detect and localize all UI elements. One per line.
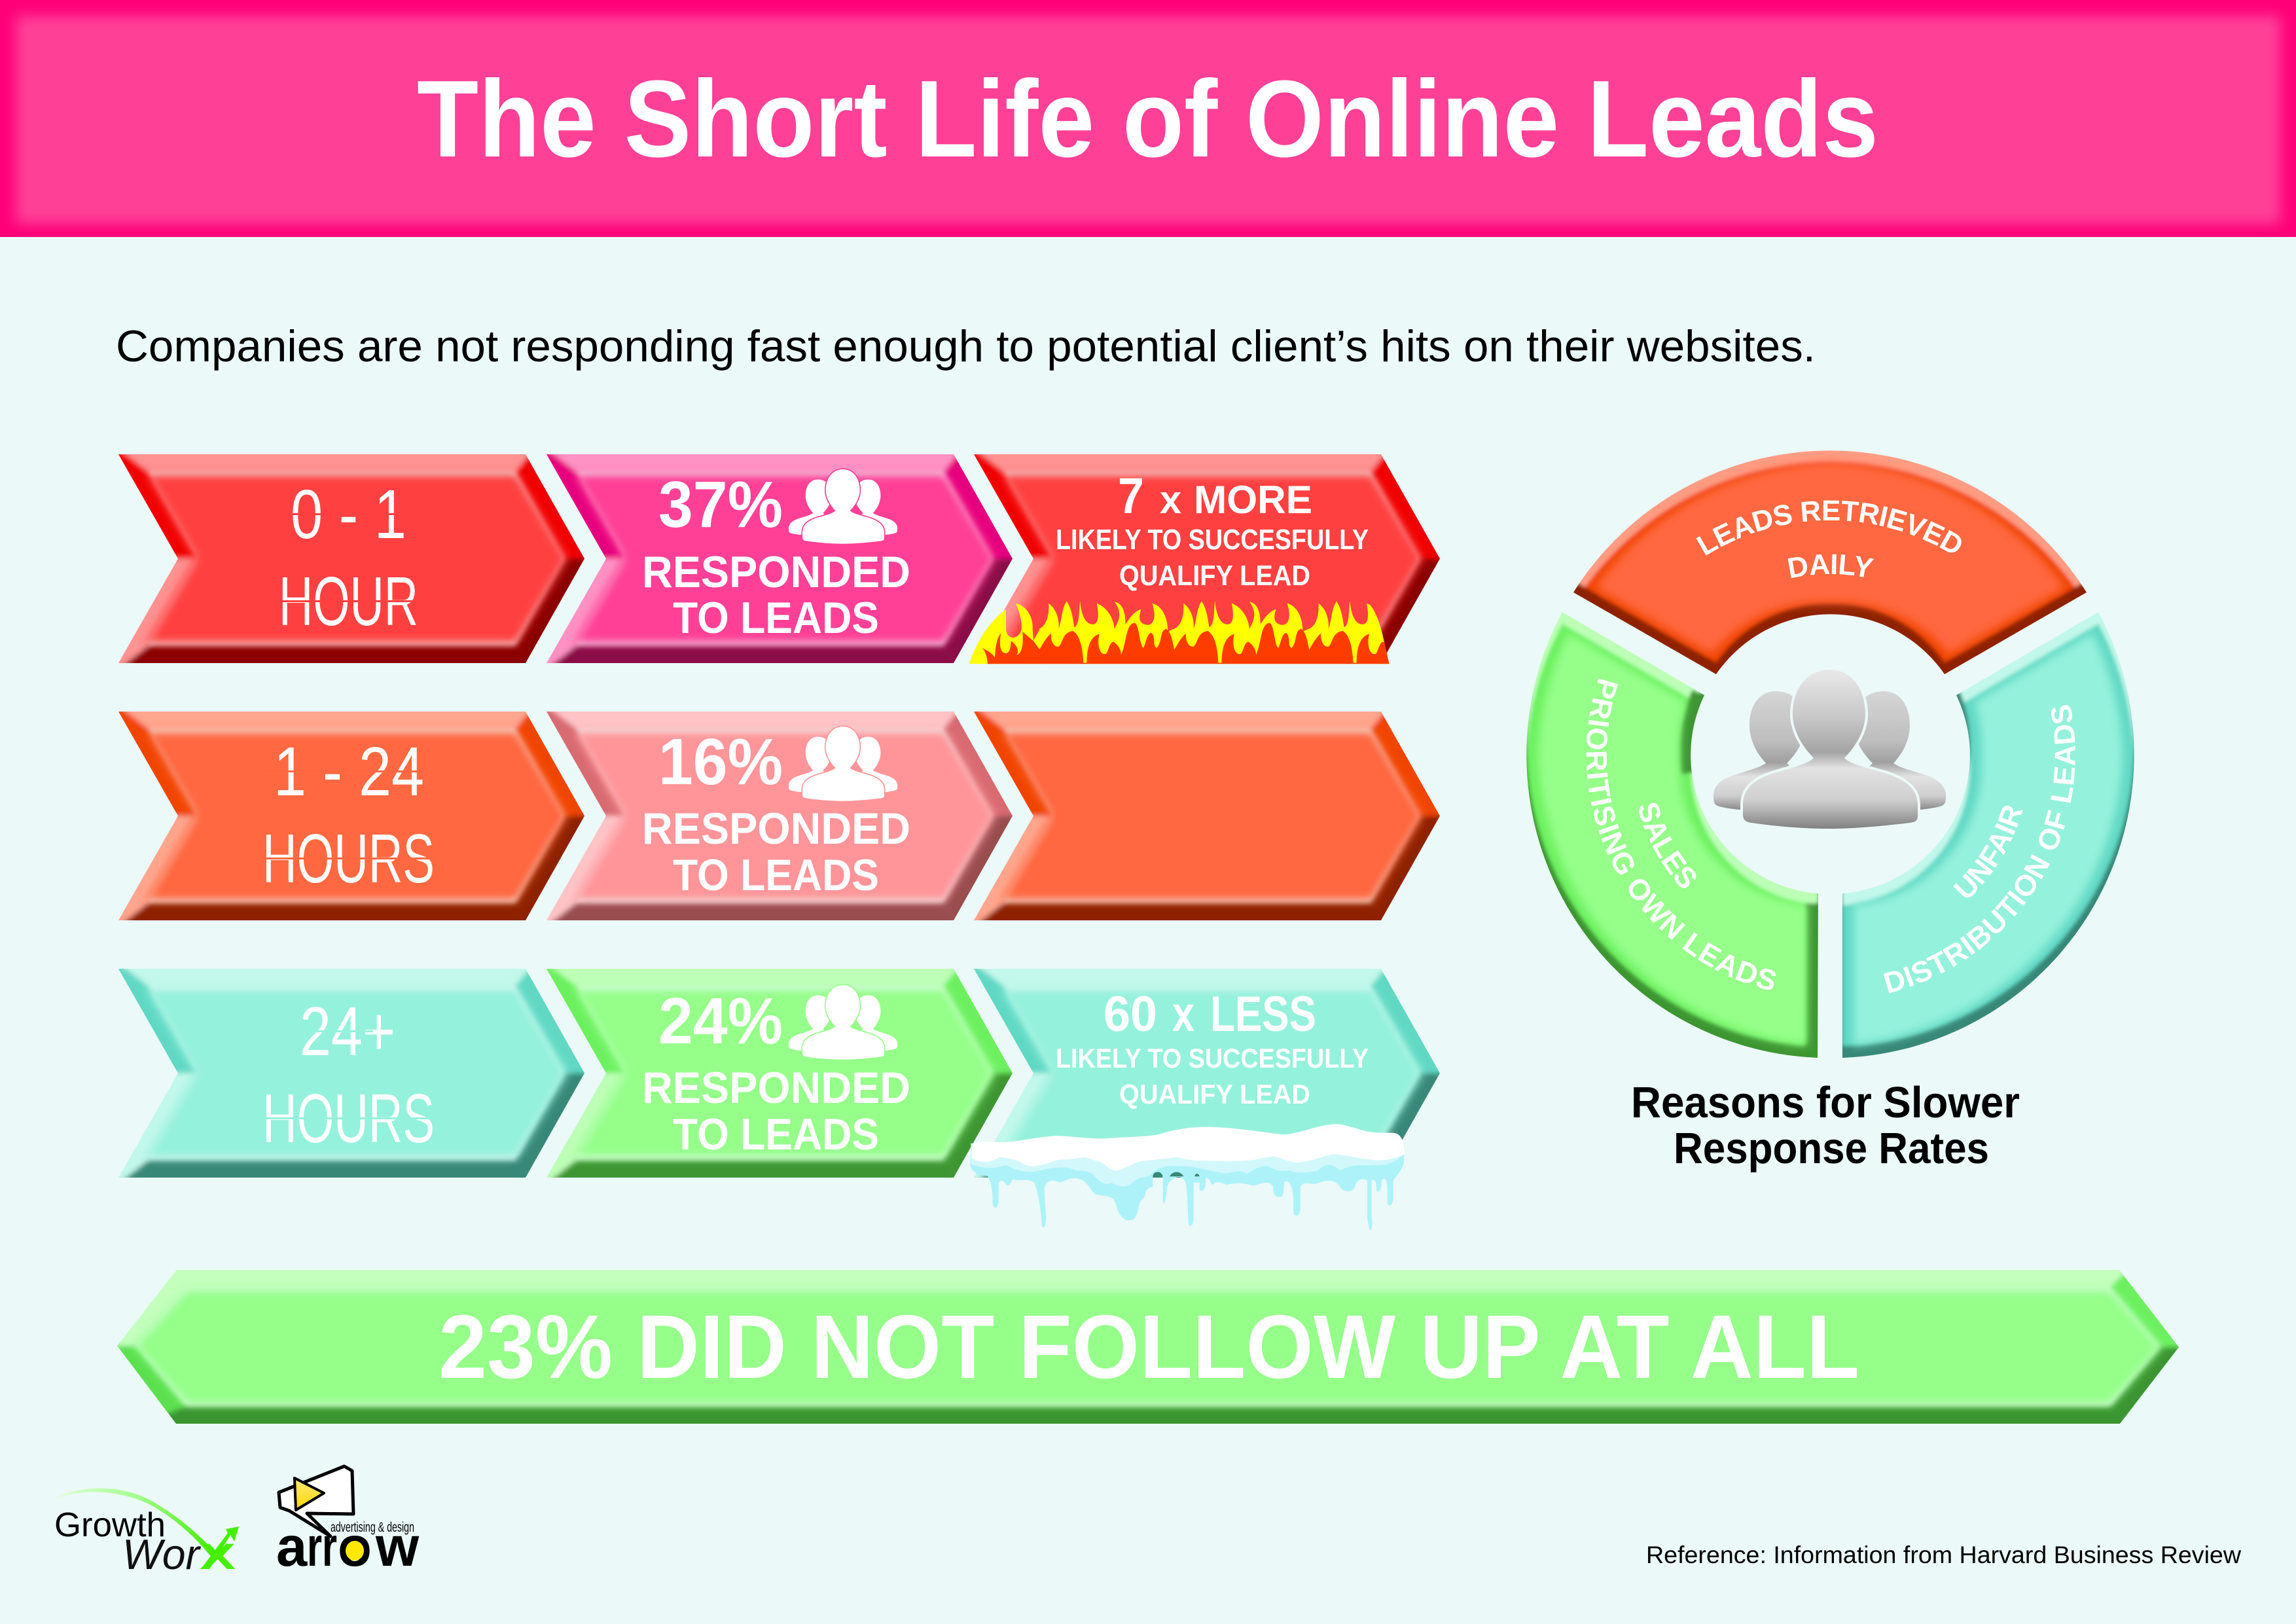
logo: arrow advertising & design: advertising & design	[331, 1520, 414, 1535]
arrow: 37% responded	[520, 428, 1044, 690]
donut caption: Reasons for Slower	[1631, 1078, 2020, 1127]
arrow: 7 x more: QUALIFY LEAD	[1119, 560, 1310, 592]
arrow: 60 x less: 60	[1103, 986, 1157, 1042]
segment: leads retrieved daily: LEADS RETRIEVED	[1696, 500, 1962, 555]
arrow: 60 x less	[948, 943, 1471, 1204]
arrow: 16% responded: RESPONDED	[642, 804, 910, 854]
arrow: 37% responded: TO LEADS	[673, 593, 879, 643]
segment: leads retrieved daily	[1573, 450, 2087, 674]
arrow: 37% responded: RESPONDED	[642, 547, 910, 597]
reference note: Reference: Information from Harvard Business Review	[1646, 1542, 2241, 1568]
icon: flames	[969, 601, 1390, 664]
arrow: 24% responded: 24%	[658, 984, 783, 1058]
arrow: 60 x less: LESS	[1210, 986, 1316, 1042]
arrow: 1-24 hours	[92, 685, 616, 947]
arrow: 60 x less: x	[1172, 986, 1194, 1042]
arrow: 7 x more: x	[1160, 478, 1181, 522]
intro sentence: Companies are not responding fast enough to potential client’s hits on their websites.	[116, 321, 1816, 371]
row 3: 24+ hours	[92, 943, 1471, 1230]
row 2: 1-24 hours	[92, 685, 1471, 947]
icon: people	[789, 469, 897, 544]
segment: sales prioritising own leads: SALES	[1639, 803, 1696, 888]
banner arrow: 23% did not follow up	[117, 1270, 2179, 1424]
logo: arrow advertising & design: rr	[307, 1516, 337, 1578]
segment: sales prioritising own leads: PRIORITISING OWN LEADS	[1587, 678, 1776, 990]
row 1: 0-1 hour	[118, 454, 1440, 664]
logo: GrowthWorX	[53, 1489, 239, 1578]
arrow: 1-24 hours: HOURS	[262, 820, 435, 897]
donut caption: Response Rates	[1674, 1124, 1989, 1173]
chart: reasons donut	[1526, 450, 2134, 1058]
logo: GrowthWorX: X	[200, 1536, 236, 1577]
segment: unfair distribution of leads: DISTRIBUTION OF LEADS	[1884, 705, 2075, 994]
arrow: 37% responded: 37%	[658, 468, 783, 541]
arrow: 60 x less: QUALIFY LEAD	[1119, 1079, 1310, 1110]
logo: GrowthWorX: Wor	[122, 1530, 201, 1578]
arrow: 1-24 hours: 1 - 24	[274, 733, 424, 810]
logo: arrow advertising & design	[276, 1466, 420, 1578]
icon: grey people	[1713, 670, 1946, 829]
title: The Short Life of Online Leads	[417, 58, 1878, 180]
arrow: 7 x more: LIKELY TO SUCCESFULLY	[1056, 524, 1369, 556]
arrow: 7 x more: 7	[1118, 468, 1144, 524]
arrow: 24+ hours	[92, 943, 616, 1204]
arrow: 7 x more: MORE	[1194, 478, 1312, 522]
arrow: 60 x less: LIKELY TO SUCCESFULLY	[1056, 1043, 1369, 1074]
logo: GrowthWorX: Growth	[54, 1506, 166, 1544]
icon: people	[789, 985, 897, 1060]
arrow: 24% responded	[520, 943, 1044, 1204]
title banner	[0, 0, 2296, 237]
segment: sales prioritising own leads	[1526, 612, 1818, 1058]
arrow: blank orange	[948, 685, 1471, 947]
arrow: 16% responded: TO LEADS	[673, 850, 879, 900]
arrow: 24% responded: TO LEADS	[673, 1110, 879, 1159]
segment: leads retrieved daily: DAILY	[1788, 554, 1874, 579]
icon: snow and icicles	[970, 1124, 1405, 1230]
arrow: 24% responded: RESPONDED	[642, 1063, 910, 1113]
donut caption	[1631, 1078, 2020, 1173]
arrow: 24+ hours: HOURS	[262, 1080, 435, 1157]
logo: arrow advertising & design: a	[276, 1516, 308, 1578]
arrow: 0-1 hour	[92, 428, 616, 690]
arrow: 0-1 hour: HOUR	[279, 563, 418, 640]
icon: people	[789, 727, 897, 801]
arrow: 24+ hours: 24+	[300, 993, 395, 1070]
logo: arrow advertising & design: ow	[338, 1516, 420, 1578]
segment: unfair distribution of leads: UNFAIR	[1953, 806, 2023, 898]
arrow: 0-1 hour: 0 - 1	[291, 476, 406, 553]
arrow: 16% responded: 16%	[658, 725, 783, 799]
arrow: 16% responded	[520, 685, 1044, 947]
arrow: 7 x more	[948, 428, 1471, 690]
segment: unfair distribution of leads	[1842, 612, 2134, 1058]
banner text: 23% DID NOT FOLLOW UP AT ALL	[439, 1297, 1859, 1398]
